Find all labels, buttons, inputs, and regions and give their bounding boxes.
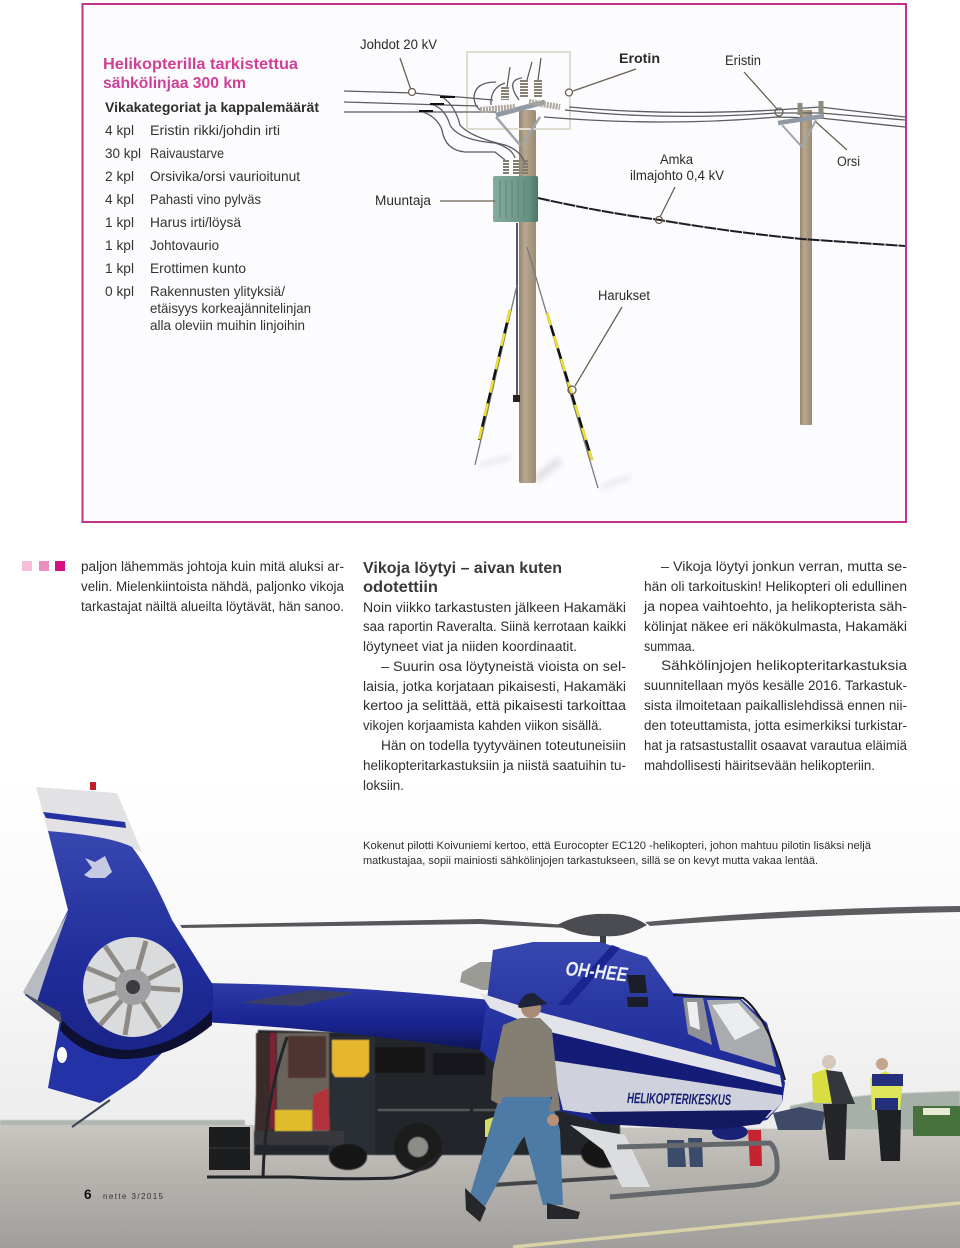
text column 2: – Suurin osa löytyneistä vioista on sel- [381, 659, 626, 674]
labels: Muuntaja [375, 193, 432, 208]
text column 2: loksiin. [363, 778, 404, 793]
transformer insulators [506, 160, 525, 175]
labels: Johdot 20 kV [360, 37, 437, 52]
20 kV wires [344, 78, 905, 163]
tail skid [72, 1100, 110, 1127]
wire sleeves [419, 97, 455, 111]
text column 2: vikojen korjaamista kahden viikon sisällä. [363, 718, 602, 733]
table: fault categories: 1 kpl [105, 261, 134, 276]
leader: Harukset [568, 307, 622, 394]
yellow runway marking [513, 1203, 960, 1247]
text column 2: helikopteritarkastuksiin ja niistä saatuihin tu- [363, 758, 626, 773]
side windows [683, 998, 712, 1045]
pole 2 [800, 110, 812, 425]
beacon [90, 782, 96, 790]
switch insulators [505, 80, 538, 100]
table: fault categories: etäisyys korkeajännitelinjan [150, 301, 311, 316]
table: fault categories: Johtovaurio [150, 238, 219, 253]
text column 1: paljon lähemmäs johtoja kuin mitä aluksi ar- [81, 559, 344, 574]
fin logo [84, 856, 112, 878]
shroud silver edge [23, 912, 68, 1002]
text column 3: sista ilmoitetaan paikallislehdissä ennen nii- [644, 698, 907, 713]
photo caption [363, 840, 872, 867]
table: fault categories: Rakennusten ylityksiä/ [150, 284, 285, 299]
text column 3: Sähkölinjojen helikopteritarkastuksia [661, 658, 908, 673]
heading: odotettiin [363, 579, 438, 596]
table: fault categories: 0 kpl [105, 284, 134, 299]
leader: Amka [656, 187, 675, 224]
people behind helicopter [485, 1115, 762, 1167]
man in blue-yellow jacket [870, 1058, 903, 1161]
table: fault categories: Vikakategoriat ja kappalemäärät [105, 99, 319, 115]
table: fault categories: 1 kpl [105, 215, 134, 230]
engine exhaust [460, 962, 498, 990]
photo caption: Kokenut pilotti Koivuniemi kertoo, että Eurocopter EC120 -helikopteri, johon mahtuu pilotin lisäksi neljä [363, 840, 872, 852]
text column 2: laisia, jotka korjataan pikaisesti, Hakamäki [363, 679, 626, 694]
leader: Orsi [816, 122, 847, 150]
text column 3 [643, 559, 908, 773]
table: fault categories [105, 99, 319, 333]
walking man [465, 993, 580, 1222]
text column 2 [363, 560, 627, 793]
text column 3: ja nopea vaihtoehto, ja helikopterista säh- [643, 599, 907, 614]
landing skid [570, 1125, 777, 1197]
registration: OH-HEE [564, 958, 629, 987]
table: fault categories: 1 kpl [105, 238, 134, 253]
labels: Eristin [725, 53, 761, 68]
page number and issue: nette 3/2015 [103, 1192, 164, 1201]
text column 2: Hän on todella tyytyväinen toteutuneisiin [381, 738, 626, 753]
company name: HELIKOPTERIKESKUS [627, 1090, 731, 1109]
crossarm 2 [778, 101, 824, 147]
text column 3: den toteuttamista, jotta esimerkiksi turkistar- [644, 718, 907, 733]
ground wire [513, 223, 520, 402]
diagram: power line [344, 37, 905, 488]
guy wire right [527, 247, 598, 488]
tail fin upper white [36, 787, 142, 852]
nose pod [712, 1124, 748, 1140]
table: fault categories: alla oleviin muihin linjoihin [150, 318, 305, 333]
fenestron [83, 937, 183, 1037]
title: sähkölinjaa 300 km [103, 75, 246, 92]
leader: Eristin [744, 72, 783, 116]
title [103, 56, 298, 92]
text column 2: Noin viikko tarkastusten jälkeen Hakamäki [363, 600, 626, 615]
text column 3: – Vikoja löytyi jonkun verran, mutta se- [661, 559, 907, 574]
ground shadows [480, 457, 630, 488]
table: fault categories: 30 kpl [105, 146, 141, 161]
windshield [707, 1000, 776, 1067]
tail fin blue [25, 831, 213, 1057]
leader: Johdot [400, 58, 416, 96]
guy wire left [475, 285, 517, 465]
text column 2: kertoo ja selittää, että pikaisesti tarkoittaa [363, 698, 627, 713]
photo: helicopter on airfield [0, 780, 960, 1248]
labels: Harukset [598, 288, 650, 303]
shroud dark lower rim [60, 1010, 212, 1059]
table: fault categories: 4 kpl [105, 192, 134, 207]
table: fault categories: Pahasti vino pylväs [150, 192, 261, 207]
tail fin stripe [43, 812, 126, 828]
ventral fin [48, 1020, 175, 1103]
labels: ilmajohto 0,4 kV [630, 168, 724, 183]
page number and issue [84, 1187, 164, 1202]
crossarm 1 [480, 102, 560, 145]
table: fault categories: Erottimen kunto [150, 261, 246, 276]
text column 3: kölinjat näkee eri näkökulmasta, Hakamäki [644, 619, 907, 634]
page number and issue: 6 [84, 1187, 92, 1202]
table: fault categories: Orsivika/orsi vaurioitunut [150, 169, 300, 184]
tail boom [203, 983, 560, 1052]
heading: Vikoja löytyi – aivan kuten [363, 560, 562, 577]
pole 1 [519, 110, 536, 483]
tanker truck [913, 1106, 960, 1136]
text column 2: löytyneet viat ja niiden koordinaatit. [363, 639, 577, 654]
decorative squares [22, 561, 65, 571]
cowling darker diagonal stripe [558, 945, 620, 1005]
title: Helikopterilla tarkistettua [103, 56, 298, 73]
white stripe [480, 993, 782, 1087]
leader: Erotin [566, 69, 636, 96]
labels: Erotin [619, 51, 660, 66]
fuel barrel [209, 1127, 250, 1170]
distant parked helicopter [773, 1107, 825, 1130]
transformer [493, 176, 538, 222]
table: fault categories: 2 kpl [105, 169, 134, 184]
text column 3: hän oli tarkoituskin! Helikopteri oli edullinen [644, 579, 907, 594]
labels: Amka [660, 152, 694, 167]
cowling vents [627, 975, 648, 1007]
table: fault categories: Harus irti/löysä [150, 215, 241, 230]
boom fairing [240, 990, 355, 1006]
sky [0, 780, 960, 1130]
man in hi-vis jacket [812, 1055, 855, 1160]
text column 3: suunnitellaan myös kesälle 2016. Tarkastuk- [644, 678, 907, 693]
photo caption: matkustajaa, sopii mainiosti sähkölinjojen tarkastukseen, sillä se on kevyt mutta vakaa lentää. [363, 855, 818, 867]
text column 3: summaa. [644, 639, 695, 654]
labels: Orsi [837, 154, 860, 169]
table: fault categories: 4 kpl [105, 123, 134, 138]
fuel hose [207, 1037, 480, 1179]
horizon trees [0, 1091, 960, 1130]
belly navy [590, 1110, 772, 1130]
text column 3: hat ja ratsastustallit osaavat varautua eläimiä [644, 738, 908, 753]
navy stripe [550, 1032, 782, 1095]
low-voltage wire [538, 198, 905, 246]
text column 1 [81, 559, 345, 614]
main rotor blades [180, 906, 960, 945]
switch rods [507, 58, 541, 87]
tarmac [0, 1125, 960, 1248]
leader: Muuntaja [440, 200, 495, 202]
labels [360, 37, 860, 303]
text column 1: tarkastajat näiltä alueilta löytävät, hän sanoo. [81, 599, 344, 614]
rear skid [487, 1133, 620, 1185]
van [254, 1030, 625, 1171]
text column 1: velin. Mielenkiintoista nähdä, paljonko vikoja [81, 579, 345, 594]
fuselage body [480, 942, 785, 1130]
canopy frame [673, 995, 785, 1080]
fuselage lower silver [550, 1058, 782, 1118]
text column 2: saa raportin Raveralta. Siinä kerrotaan kaikki [363, 619, 626, 634]
panel: diagram box [82, 4, 906, 522]
shroud bottom edge [23, 992, 62, 1024]
table: fault categories: Eristin rikki/johdin irti [150, 123, 280, 138]
heading [363, 560, 562, 596]
text column 3: mahdollisesti häiritsevään helikopteriin. [644, 758, 875, 773]
table: fault categories: Raivaustarve [150, 146, 224, 161]
switch frame [467, 52, 570, 129]
